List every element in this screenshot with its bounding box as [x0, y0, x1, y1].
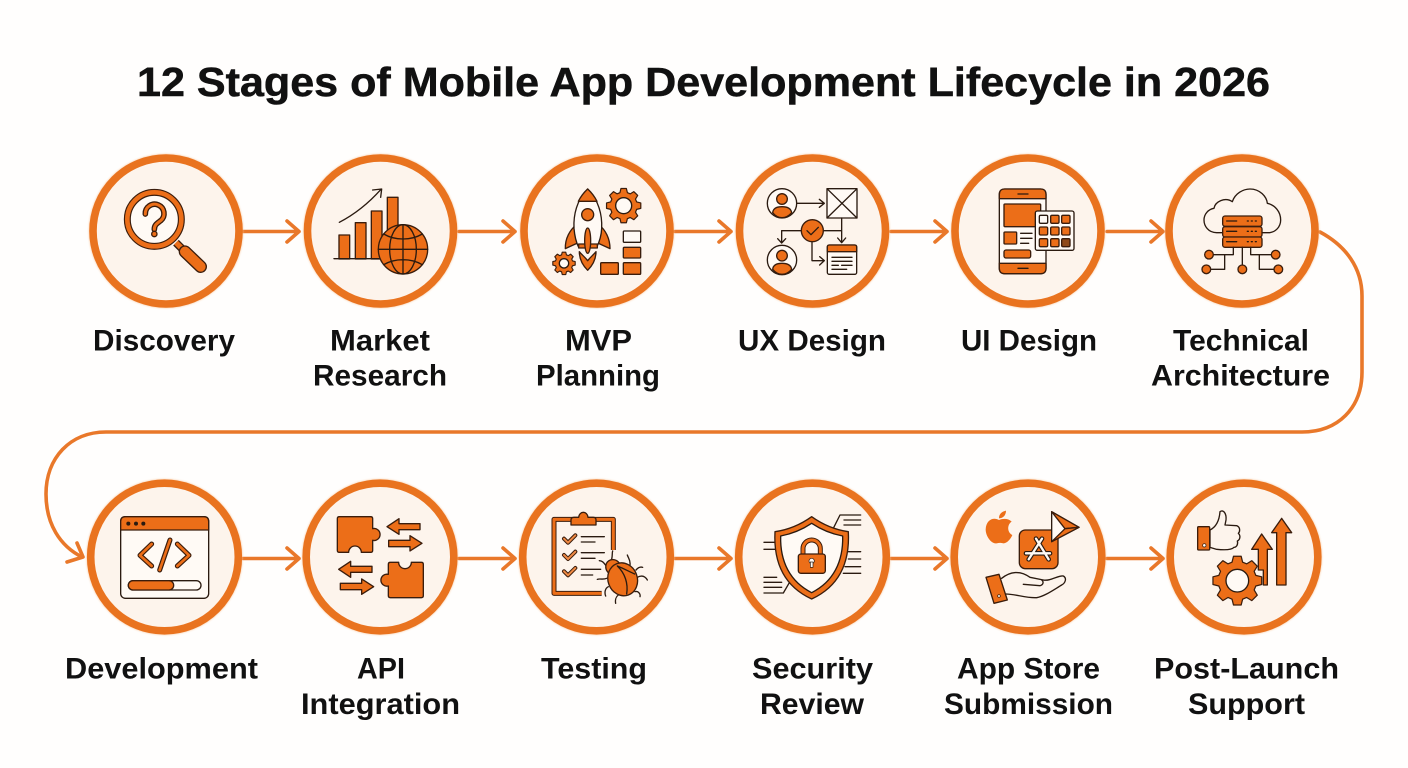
icon: phone and widget grid [999, 189, 1074, 274]
label: Architecture [1151, 360, 1330, 392]
label: Development [65, 652, 258, 686]
label [313, 324, 447, 392]
arrow: 3 to 4 [675, 221, 731, 242]
arrow: 1 to 2 [243, 221, 299, 242]
label: UX Design [738, 324, 886, 358]
icon: puzzle pieces and arrows [337, 517, 423, 598]
label: Market [330, 324, 430, 358]
icon: cloud server network [1202, 189, 1283, 274]
label: Technical [1173, 324, 1309, 358]
arrow: 5 to 6 [1107, 221, 1163, 242]
arrow: 10 to 11 [891, 548, 947, 569]
label: Planning [536, 360, 660, 392]
icon: app store, apple, play and hand [986, 511, 1079, 603]
arrow: 2 to 3 [459, 221, 515, 242]
panel: Discovery [93, 158, 239, 358]
title: 12 Stages of Mobile App Development Lifecycle in 2026 [137, 59, 1270, 105]
label: Testing [541, 652, 647, 686]
label: Review [760, 688, 865, 721]
label [1151, 324, 1330, 392]
label: Post-Launch [1154, 652, 1339, 686]
label: Submission [944, 688, 1113, 721]
arrow: 8 to 9 [459, 548, 515, 569]
label [301, 652, 460, 721]
panel: Post-Launch Support [1154, 483, 1339, 721]
panel: UX Design [738, 158, 886, 358]
icon: clipboard and bug [554, 512, 647, 603]
label: Research [313, 360, 447, 392]
panel: Technical Architecture [1151, 158, 1330, 392]
label: UI Design [961, 324, 1097, 358]
icon: bar chart and globe [334, 189, 428, 274]
label [1154, 652, 1339, 721]
label [536, 324, 660, 392]
icon: thumbs up, gear and growth arrows [1198, 511, 1292, 605]
label: API [357, 652, 405, 686]
icon: rocket, gears and blocks [553, 189, 641, 275]
arrow: 4 to 5 [891, 221, 947, 242]
panel: App Store Submission [944, 483, 1113, 721]
panel: Market Research [308, 158, 454, 392]
panel: Testing [523, 483, 670, 686]
arrow: 7 to 8 [243, 548, 299, 569]
label: Security [752, 652, 873, 686]
arrow: 9 to 10 [675, 548, 731, 569]
label: Discovery [93, 324, 235, 358]
icon: user flow diagram [767, 189, 857, 275]
label: MVP [565, 324, 632, 358]
icon: shield and padlock [764, 515, 861, 599]
label: Integration [301, 688, 460, 721]
panel: API Integration [301, 483, 460, 721]
icon: code window [121, 517, 209, 598]
label: Support [1188, 688, 1305, 721]
panel: Development [65, 483, 258, 686]
arrow: 11 to 12 [1107, 548, 1163, 569]
panel: UI Design [955, 158, 1101, 358]
icon: magnifier with question mark [127, 192, 201, 267]
connector: row one to row two [46, 232, 1362, 562]
panel: MVP Planning [524, 158, 670, 392]
label [944, 652, 1113, 721]
panel: Security Review [739, 483, 886, 721]
label [752, 652, 873, 721]
label: App Store [957, 652, 1100, 686]
